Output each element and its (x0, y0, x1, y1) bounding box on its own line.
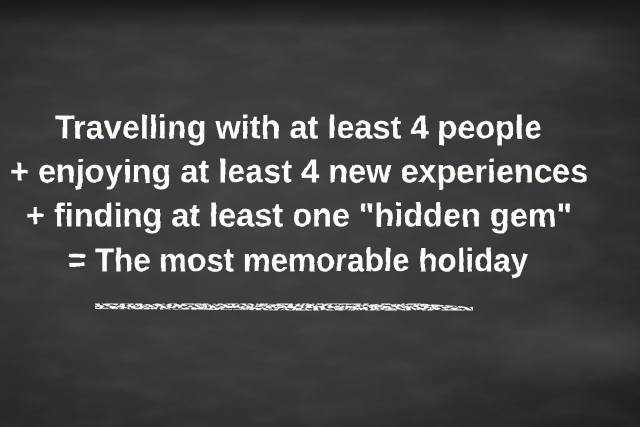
chalk equation text (10, 108, 588, 278)
line 3: hidden gem: + finding at least one "hidden gem" (26, 196, 572, 234)
line 4: result: = The most memorable holiday (68, 242, 529, 278)
line 2: experiences: + enjoying at least 4 new experiences (10, 152, 588, 190)
chalk underline (95, 304, 473, 310)
line 1: travelling: Travelling with at least 4 people (55, 108, 542, 146)
